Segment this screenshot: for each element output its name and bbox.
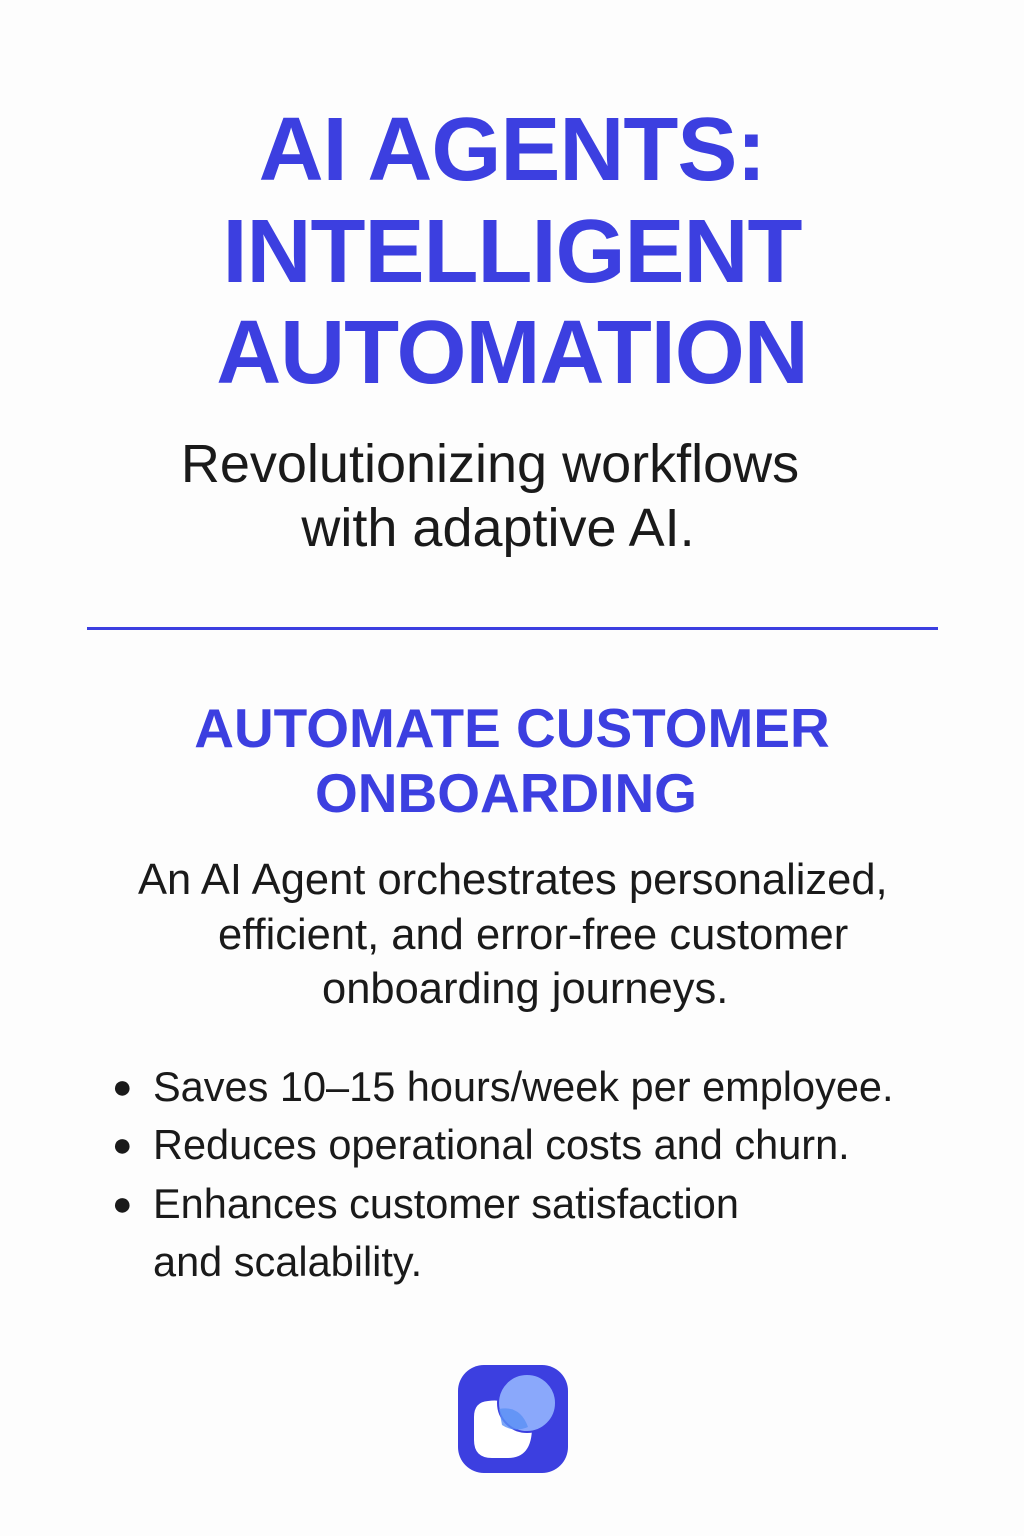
description text bbox=[138, 856, 888, 1013]
subtitle: Revolutionizing workflows bbox=[181, 434, 799, 494]
subtitle bbox=[181, 434, 799, 558]
title: AUTOMATION bbox=[216, 303, 808, 403]
bullet 3 bbox=[112, 1180, 739, 1285]
title bbox=[216, 100, 808, 403]
section heading bbox=[194, 697, 830, 824]
bullet list bbox=[112, 1063, 894, 1285]
description text: onboarding journeys. bbox=[322, 965, 728, 1013]
title: INTELLIGENT bbox=[223, 202, 801, 302]
bullet 3: ● bbox=[112, 1185, 133, 1223]
description text: An AI Agent orchestrates personalized, bbox=[138, 856, 888, 904]
bullet 1: ● bbox=[112, 1068, 133, 1106]
bullet 1: Saves 10–15 hours/week per employee. bbox=[153, 1063, 894, 1110]
bullet 2: Reduces operational costs and churn. bbox=[153, 1121, 850, 1168]
title: AI AGENTS: bbox=[259, 100, 765, 200]
bullet 3: and scalability. bbox=[153, 1238, 422, 1285]
subtitle: with adaptive AI. bbox=[301, 498, 695, 558]
section heading: AUTOMATE CUSTOMER bbox=[194, 697, 830, 759]
description text: efficient, and error-free customer bbox=[218, 911, 848, 959]
icon: app logo bbox=[458, 1365, 568, 1473]
bullet 2: ● bbox=[112, 1126, 133, 1164]
bullet 3: Enhances customer satisfaction bbox=[153, 1180, 739, 1227]
section heading: ONBOARDING bbox=[315, 762, 697, 824]
